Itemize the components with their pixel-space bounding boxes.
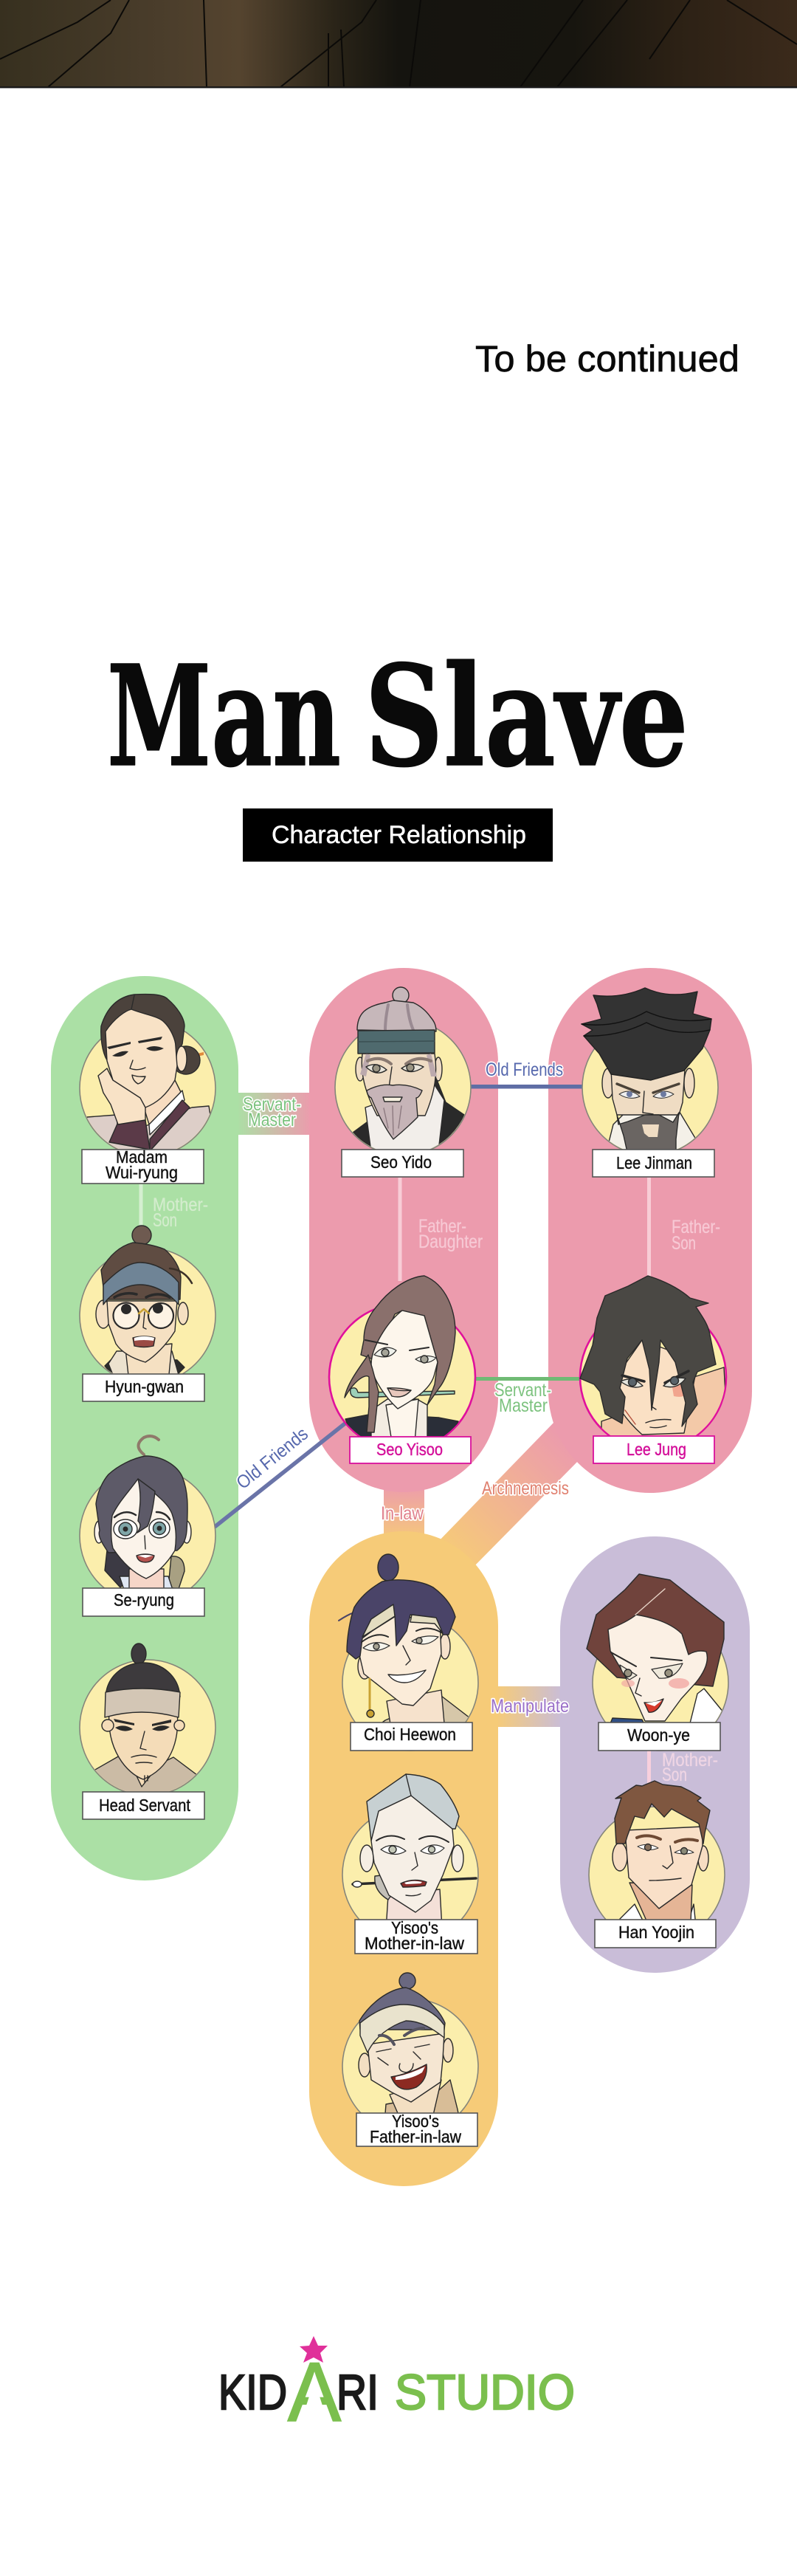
relation label: Father-Daughter: Daughter	[418, 1232, 483, 1252]
relation label: Archnemesis: Archnemesis	[482, 1478, 569, 1499]
portrait	[587, 1574, 728, 1751]
portrait	[80, 1644, 215, 1802]
portrait	[329, 1276, 475, 1451]
relation label: Servant-Master green band	[243, 1094, 301, 1130]
panel: orange group	[309, 1531, 498, 2186]
name label	[356, 2112, 477, 2146]
name label	[598, 1723, 720, 1751]
title: Man Slave: Slave	[365, 635, 689, 798]
relation label: Mother-Son green panel: Mother-	[153, 1195, 208, 1215]
name label: Mother-in-law	[365, 1934, 464, 1953]
name label: Yisoo's	[392, 2112, 439, 2131]
panel: pink group Seo	[309, 968, 498, 1492]
name label: Father-in-law	[370, 2127, 461, 2146]
name label	[595, 1920, 716, 1948]
logo: Kidari Studio: STUDIO	[395, 2365, 575, 2420]
relation label: Mother-Son purple panel	[662, 1750, 718, 1785]
relation label: Manipulate: Manipulate	[491, 1696, 569, 1717]
portrait	[582, 988, 718, 1158]
name label: Han Yoojin	[618, 1923, 694, 1942]
portrait	[80, 1436, 215, 1604]
relation label: Father-Son: Father-	[672, 1217, 720, 1237]
connector band: manipulate	[496, 1686, 562, 1727]
character: Seo Yido	[335, 987, 471, 1177]
connector band: servant-master	[236, 1093, 311, 1135]
connector band: in-law	[384, 1484, 424, 1543]
relation label: Mother-Son green panel	[153, 1195, 208, 1231]
name label	[83, 1588, 204, 1616]
name label: Madam	[116, 1147, 168, 1167]
relation line: Mother-Son green panel	[139, 1184, 143, 1229]
title: Man Slave: Man	[107, 635, 341, 798]
to be continued caption: To be continued	[475, 338, 739, 379]
name label: Choi Heewon	[364, 1725, 456, 1744]
character: Lee Jinman	[582, 988, 718, 1177]
relation label: Mother-Son purple panel: Son	[662, 1765, 687, 1785]
name label: Yisoo's	[391, 1918, 438, 1937]
relation label: In-law: In-law	[381, 1503, 424, 1524]
name label	[351, 1723, 472, 1751]
relation line: Servant-Master Seo Yisoo to Lee Jung	[476, 1377, 580, 1381]
relation label: Father-Daughter: Father-	[418, 1216, 466, 1237]
name label	[355, 1918, 477, 1954]
relation line: Old Friends Seo Yisoo to Se-ryung	[215, 1422, 347, 1527]
logo: Kidari Studio: A	[288, 2346, 342, 2439]
name label	[350, 1437, 471, 1463]
relation line: Father-Daughter	[398, 1178, 401, 1281]
comic panel strip	[0, 0, 797, 88]
subtitle banner: Character Relationship	[272, 821, 526, 849]
portrait	[588, 1780, 725, 1920]
character: Hyun-gwan	[80, 1226, 215, 1401]
panel: green group	[51, 976, 238, 1881]
character: Seo Yisoo	[329, 1276, 475, 1463]
relation label: Father-Son	[672, 1217, 720, 1254]
relation line: Mother-Son purple panel	[647, 1751, 651, 1786]
relation label: Servant-Master lower: Master	[499, 1395, 548, 1416]
name label: Hyun-gwan	[105, 1377, 184, 1396]
character: Head Servant	[80, 1644, 215, 1819]
relation label: Mother-Son green panel: Son	[153, 1210, 177, 1231]
relation label: Father-Daughter	[418, 1216, 483, 1252]
portrait	[335, 987, 471, 1158]
name label: Lee Jung	[627, 1440, 686, 1459]
logo: Kidari Studio	[218, 2336, 575, 2439]
name label: Se-ryung	[114, 1590, 174, 1610]
portrait	[339, 1554, 478, 1756]
panel: pink group Lee	[548, 968, 752, 1493]
portrait	[342, 1773, 479, 1920]
character: Se-ryung	[80, 1436, 215, 1616]
relation label: Servant-Master lower	[494, 1380, 551, 1416]
relation label: Old Friends top: Old Friends	[486, 1059, 563, 1080]
name label	[82, 1147, 204, 1184]
name label: Head Servant	[99, 1796, 191, 1815]
name label: Seo Yido	[370, 1153, 432, 1172]
character: Yisoo's Mother-in-law	[342, 1774, 478, 1954]
name label	[83, 1792, 204, 1819]
portrait	[80, 1226, 215, 1384]
logo: Kidari Studio: KID	[218, 2365, 287, 2420]
relation line: Father-Son	[647, 1178, 651, 1277]
character: Woon-ye	[587, 1574, 728, 1751]
relation label: Mother-Son purple panel: Mother-	[662, 1750, 718, 1770]
name label: Wui-ryung	[106, 1163, 178, 1182]
logo: Kidari Studio: RI	[337, 2365, 379, 2420]
title: Man Slave	[107, 635, 689, 798]
character: Lee Jung	[580, 1276, 727, 1463]
panel: purple group	[560, 1536, 750, 1973]
character: Yisoo's Father-in-law	[342, 1973, 478, 2146]
name label	[593, 1150, 714, 1177]
relation label: Father-Son: Son	[672, 1233, 696, 1254]
name label: Seo Yisoo	[376, 1440, 443, 1459]
portrait	[342, 1972, 479, 2113]
name label: Woon-ye	[627, 1725, 690, 1745]
relation label: Servant-Master green band: Master	[248, 1110, 296, 1130]
character: Choi Heewon	[339, 1554, 478, 1756]
relation label: Servant-Master lower: Servant-	[494, 1380, 551, 1401]
name label	[83, 1374, 204, 1401]
portrait	[77, 995, 218, 1162]
subtitle banner	[243, 808, 553, 862]
name label	[342, 1150, 463, 1177]
relation line: Old Friends Seo Yido to Lee Jinman	[470, 1085, 585, 1088]
portrait	[580, 1276, 727, 1451]
name label: Lee Jinman	[616, 1153, 692, 1172]
character: Madam Wui-ryung	[77, 995, 218, 1184]
relation label: Old Friends diagonal: Old Friends	[232, 1423, 312, 1494]
relation label: Servant-Master green band: Servant-	[243, 1094, 301, 1115]
character: Han Yoojin	[589, 1781, 725, 1948]
connector band: archnemesis	[435, 1421, 583, 1568]
name label	[593, 1436, 714, 1463]
